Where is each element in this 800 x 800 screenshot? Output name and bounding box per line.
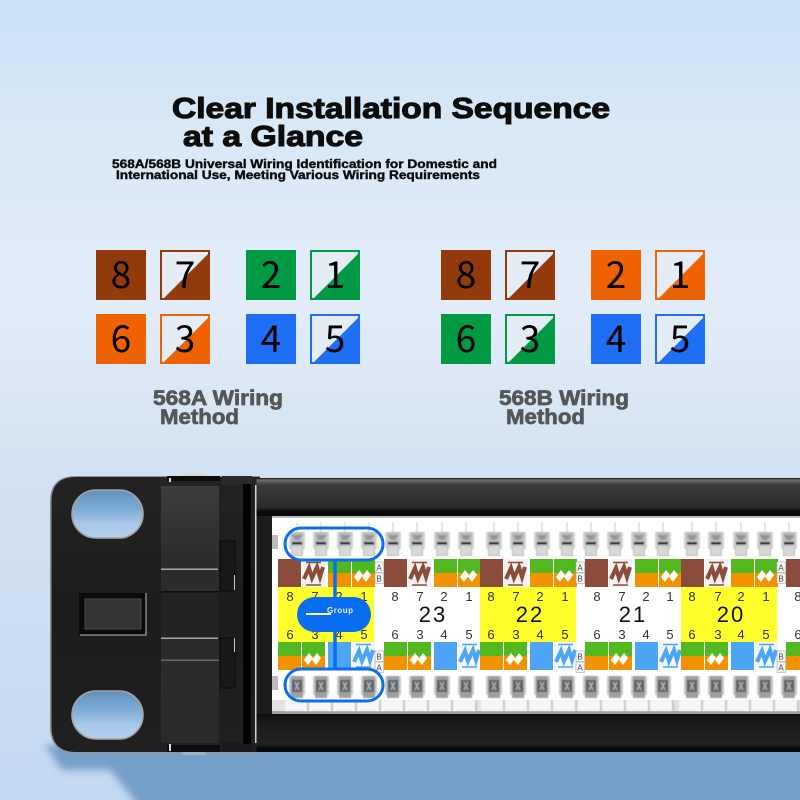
A/B markers: B — [376, 574, 382, 584]
upper mounting slot — [72, 490, 143, 538]
pin numbers, lower row: 3 — [416, 627, 424, 642]
pin numbers, lower row: 3 — [311, 627, 319, 642]
panel: 568A colour code: 8 — [111, 245, 131, 299]
port numbers — [419, 602, 745, 627]
pin numbers, upper row: 7 — [416, 589, 424, 604]
panel: 568B colour code: 7 — [520, 245, 540, 299]
panel: 568B colour code: 8 — [456, 245, 476, 299]
label: 568A wiring method: Method — [160, 406, 239, 429]
pin numbers, upper row: 8 — [391, 589, 399, 604]
comb strip — [285, 700, 799, 711]
panel: 568B colour code: 2 — [606, 245, 626, 299]
subtitle — [112, 157, 497, 182]
white label window — [272, 516, 800, 714]
title — [172, 93, 610, 153]
subtitle: International Use, Meeting Various Wiring Requirements — [116, 168, 480, 182]
port numbers: 20 — [717, 602, 745, 627]
pin numbers, upper row — [286, 589, 800, 604]
pin numbers, lower row: 4 — [737, 627, 745, 642]
pin numbers, lower row: 3 — [618, 627, 626, 642]
A/B markers: A — [577, 564, 583, 572]
bottom punch-down terminals — [289, 676, 797, 698]
pin numbers, upper row: 2 — [335, 589, 343, 604]
pin numbers, upper row: 2 — [642, 589, 650, 604]
A/B markers: B — [778, 574, 784, 584]
port numbers: 22 — [516, 602, 544, 627]
panel: 568B colour code: 4 — [606, 309, 626, 363]
panel: 568B colour code — [441, 245, 705, 364]
pin numbers, upper row: 8 — [593, 589, 601, 604]
panel: 568A colour code: 2 — [261, 245, 281, 299]
hinge block — [161, 486, 235, 743]
pin numbers, lower row: 5 — [666, 627, 674, 642]
pin numbers, lower row: 6 — [593, 627, 601, 642]
panel: 568A colour code: 6 — [111, 309, 131, 363]
A/B markers: A — [778, 564, 784, 572]
rack ear bracket — [50, 473, 260, 755]
label: 568B wiring method: Method — [506, 406, 585, 429]
pin numbers, lower row: 3 — [512, 627, 520, 642]
pin numbers, upper row: 7 — [618, 589, 626, 604]
pin numbers, lower row — [286, 627, 800, 642]
pin numbers, upper row: 7 — [512, 589, 520, 604]
A/B markers: A — [376, 664, 382, 672]
panel: 568A colour code — [96, 245, 360, 364]
A/B markers: B — [577, 652, 583, 662]
title: Clear Installation Sequence — [172, 93, 610, 125]
pin numbers, upper row: 8 — [286, 589, 294, 604]
pin numbers, lower row: 4 — [642, 627, 650, 642]
pin numbers, lower row: 6 — [487, 627, 495, 642]
label: 568A wiring method — [153, 387, 283, 429]
pin numbers, upper row: 1 — [762, 589, 770, 604]
pin numbers, lower row: 5 — [762, 627, 770, 642]
pin numbers, lower row: 5 — [561, 627, 569, 642]
pin numbers, upper row: 8 — [688, 589, 696, 604]
pin numbers, upper row: 8 — [487, 589, 495, 604]
A/B markers — [375, 562, 786, 672]
pin numbers, upper row: 1 — [465, 589, 473, 604]
port numbers: 23 — [419, 602, 447, 627]
A/B markers: A — [577, 664, 583, 672]
pin numbers, lower row: 6 — [286, 627, 294, 642]
pin numbers, lower row: 5 — [360, 627, 368, 642]
A/B markers: A — [778, 664, 784, 672]
bottom colour tiles — [278, 642, 800, 670]
pin numbers, lower row: 4 — [440, 627, 448, 642]
pin numbers, upper row: 7 — [311, 589, 319, 604]
panel: 568B colour code: 6 — [456, 309, 476, 363]
pin numbers, upper row: 1 — [360, 589, 368, 604]
callout: group highlight: Group — [327, 606, 353, 615]
A/B markers: A — [376, 564, 382, 572]
pin numbers, upper row: 2 — [536, 589, 544, 604]
pin numbers, lower row: 4 — [536, 627, 544, 642]
yellow pair-group bands — [278, 587, 777, 642]
pin numbers, upper row: 2 — [440, 589, 448, 604]
callout: group highlight — [285, 528, 383, 701]
title: at a Glance — [183, 121, 363, 153]
pin numbers, lower row: 5 — [465, 627, 473, 642]
port numbers: 21 — [619, 602, 647, 627]
front frame edge — [243, 478, 800, 752]
A/B markers: B — [778, 652, 784, 662]
panel: 568A colour code: 7 — [175, 245, 195, 299]
top punch-down terminals — [289, 522, 797, 556]
pin numbers, lower row: 4 — [335, 627, 343, 642]
top colour tiles — [278, 559, 800, 587]
panel: 568A colour code: 4 — [261, 309, 281, 363]
panel shadow on the wall — [45, 745, 800, 800]
pin numbers, upper row: 2 — [737, 589, 745, 604]
subtitle: 568A/568B Universal Wiring Identification for Domestic and — [112, 157, 497, 171]
panel: 568B colour code: 1 — [670, 245, 690, 299]
label: 568B wiring method — [499, 387, 629, 429]
panel: 568A colour code: 1 — [325, 245, 345, 299]
panel: 568A colour code: 5 — [325, 309, 345, 363]
pin numbers, lower row: 6 — [391, 627, 399, 642]
pin numbers, lower row: 3 — [714, 627, 722, 642]
panel: 568A colour code: 3 — [175, 309, 195, 363]
panel: 568B colour code: 5 — [670, 309, 690, 363]
square latch opening — [79, 593, 146, 635]
A/B markers: B — [376, 652, 382, 662]
label: 568A wiring method: 568A Wiring — [153, 387, 283, 410]
A/B markers: B — [577, 574, 583, 584]
patch panel — [50, 473, 800, 755]
label: 568B wiring method: 568B Wiring — [499, 387, 629, 410]
lower mounting slot — [72, 691, 143, 739]
pin numbers, lower row: 6 — [688, 627, 696, 642]
panel: 568B colour code: 3 — [520, 309, 540, 363]
pin numbers, upper row: 1 — [561, 589, 569, 604]
pin numbers, upper row: 7 — [714, 589, 722, 604]
pin numbers, upper row: 1 — [666, 589, 674, 604]
